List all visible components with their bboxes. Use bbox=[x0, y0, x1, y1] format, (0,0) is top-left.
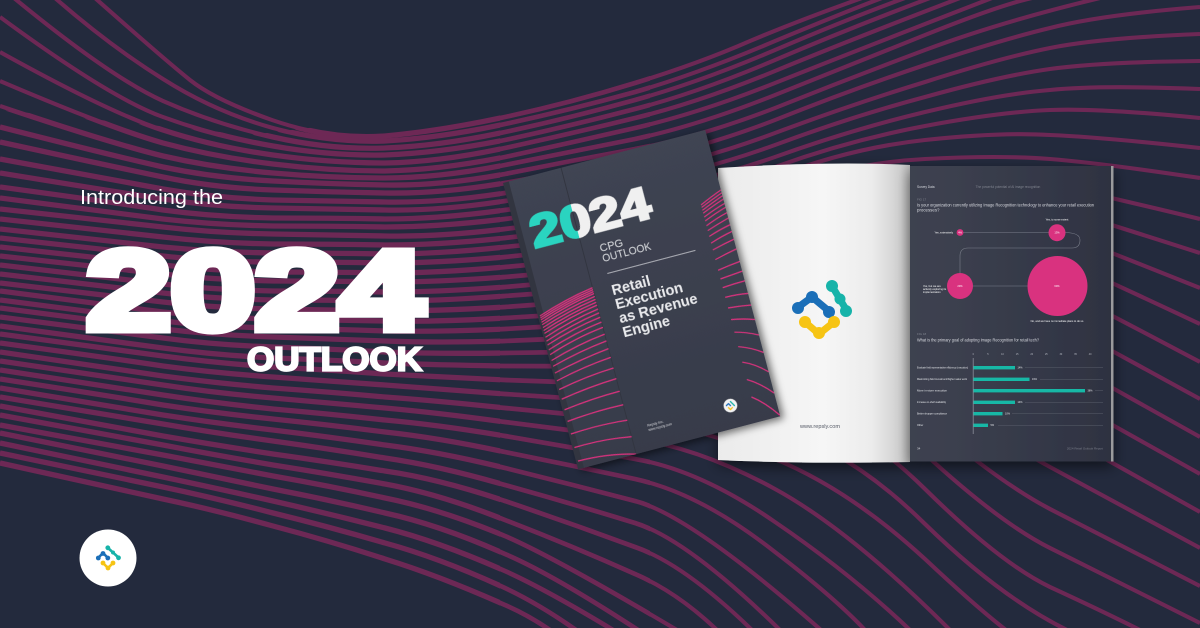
headline outlook: OUTLOOK bbox=[247, 340, 422, 378]
axis tick labels: 35 bbox=[1074, 353, 1077, 356]
row labels: Evaluate field representative efficiency (execution) bbox=[917, 367, 968, 370]
bubble chart bbox=[923, 218, 1088, 323]
bar values: 5% bbox=[990, 424, 995, 427]
bubble chart: Yes, but we are bbox=[923, 284, 941, 288]
bubble chart: 23% bbox=[957, 284, 963, 288]
page header: The powerful potential of AI image recognition bbox=[976, 185, 1041, 189]
cover title: Retail bbox=[610, 274, 652, 299]
bar values: 14% bbox=[1018, 401, 1023, 404]
logo badge bbox=[80, 530, 136, 586]
row labels: More in-store execution bbox=[917, 390, 948, 393]
bars bbox=[974, 366, 1085, 427]
axis tick labels: 10 bbox=[1001, 353, 1004, 356]
page footer: 34 bbox=[917, 446, 921, 450]
row labels: Maximizing field investment/higher sales work bbox=[917, 378, 968, 381]
bubble chart: 4% bbox=[958, 230, 963, 234]
cover logo bbox=[722, 397, 739, 414]
figure 17 question: processes? bbox=[917, 208, 940, 212]
row labels: Better shopper compliance bbox=[917, 413, 948, 416]
axis tick labels: 0 bbox=[973, 353, 975, 356]
axis tick labels: 5 bbox=[987, 353, 989, 356]
row labels: Increase on-shelf availability bbox=[917, 401, 947, 404]
figure 17 question: FIG 17 bbox=[917, 198, 927, 202]
headline 2024: 2024 bbox=[86, 228, 424, 353]
bubble chart: implementation bbox=[923, 290, 941, 294]
page footer: 2024 Retail Outlook Report bbox=[1067, 446, 1103, 450]
page header: Survey Data bbox=[917, 185, 935, 189]
cover footer: Repsly Inc. bbox=[647, 420, 664, 428]
report cover bbox=[503, 130, 780, 469]
bar values bbox=[990, 367, 1093, 427]
bar values: 19% bbox=[1032, 378, 1038, 381]
bar values: 14% bbox=[1018, 367, 1023, 370]
bar values: 38% bbox=[1088, 390, 1093, 393]
cover title: as Revenue bbox=[617, 291, 699, 327]
cover title: Execution bbox=[614, 280, 685, 313]
right dark page bbox=[910, 166, 1114, 462]
cover year: 2024 bbox=[524, 177, 656, 258]
row guide lines bbox=[998, 368, 1103, 425]
cover subtitle: CPG bbox=[598, 237, 625, 255]
cover title: Engine bbox=[621, 313, 672, 341]
bubble chart: 60% bbox=[1054, 284, 1060, 288]
cover divider bbox=[607, 250, 695, 273]
cover pink line patterns bbox=[521, 190, 780, 469]
bubble chart: No, and we have no immediate plans to do so bbox=[1031, 319, 1084, 323]
left white page bbox=[718, 164, 910, 463]
figure 17 question: Is your organization currently utilizing Image Recognition technology to enhance your retail execution bbox=[917, 202, 1095, 208]
open book mockup bbox=[718, 164, 1114, 463]
axis tick labels bbox=[973, 353, 1092, 356]
bar chart bbox=[917, 353, 1103, 434]
bubble chart: 13% bbox=[1054, 231, 1060, 235]
cover title bbox=[610, 263, 703, 341]
page footer bbox=[917, 446, 1103, 450]
bubble chart: Yes, extensively bbox=[934, 230, 954, 234]
figure 18 question bbox=[917, 332, 1039, 342]
axis tick labels: 20 bbox=[1030, 353, 1034, 356]
axis tick labels: 15 bbox=[1016, 353, 1019, 356]
axis tick labels: 40 bbox=[1089, 353, 1092, 356]
figure 17 question bbox=[917, 198, 1095, 212]
row labels: Other bbox=[917, 424, 923, 427]
bar values: 10% bbox=[1005, 413, 1011, 416]
figure 18 question: What is the primary goal of adopting Image Recognition for retail tech? bbox=[917, 338, 1039, 342]
page header bbox=[917, 185, 1041, 189]
cover footer: www.repsly.com bbox=[648, 422, 673, 432]
bubble chart: actively exploring its bbox=[923, 287, 947, 291]
website url: www.repsly.com bbox=[799, 424, 840, 430]
figure 18 question: FIG 18 bbox=[917, 332, 927, 336]
bubble chart: Yes, to some extent bbox=[1046, 218, 1069, 222]
large logo on left page bbox=[792, 280, 852, 339]
intro text: Introducing the bbox=[80, 187, 223, 209]
row labels bbox=[917, 367, 968, 427]
cover subtitle bbox=[598, 230, 653, 265]
axis tick labels: 25 bbox=[1045, 353, 1048, 356]
cover subtitle: OUTLOOK bbox=[601, 241, 653, 265]
cover footer bbox=[647, 418, 673, 432]
axis tick labels: 30 bbox=[1060, 353, 1063, 356]
